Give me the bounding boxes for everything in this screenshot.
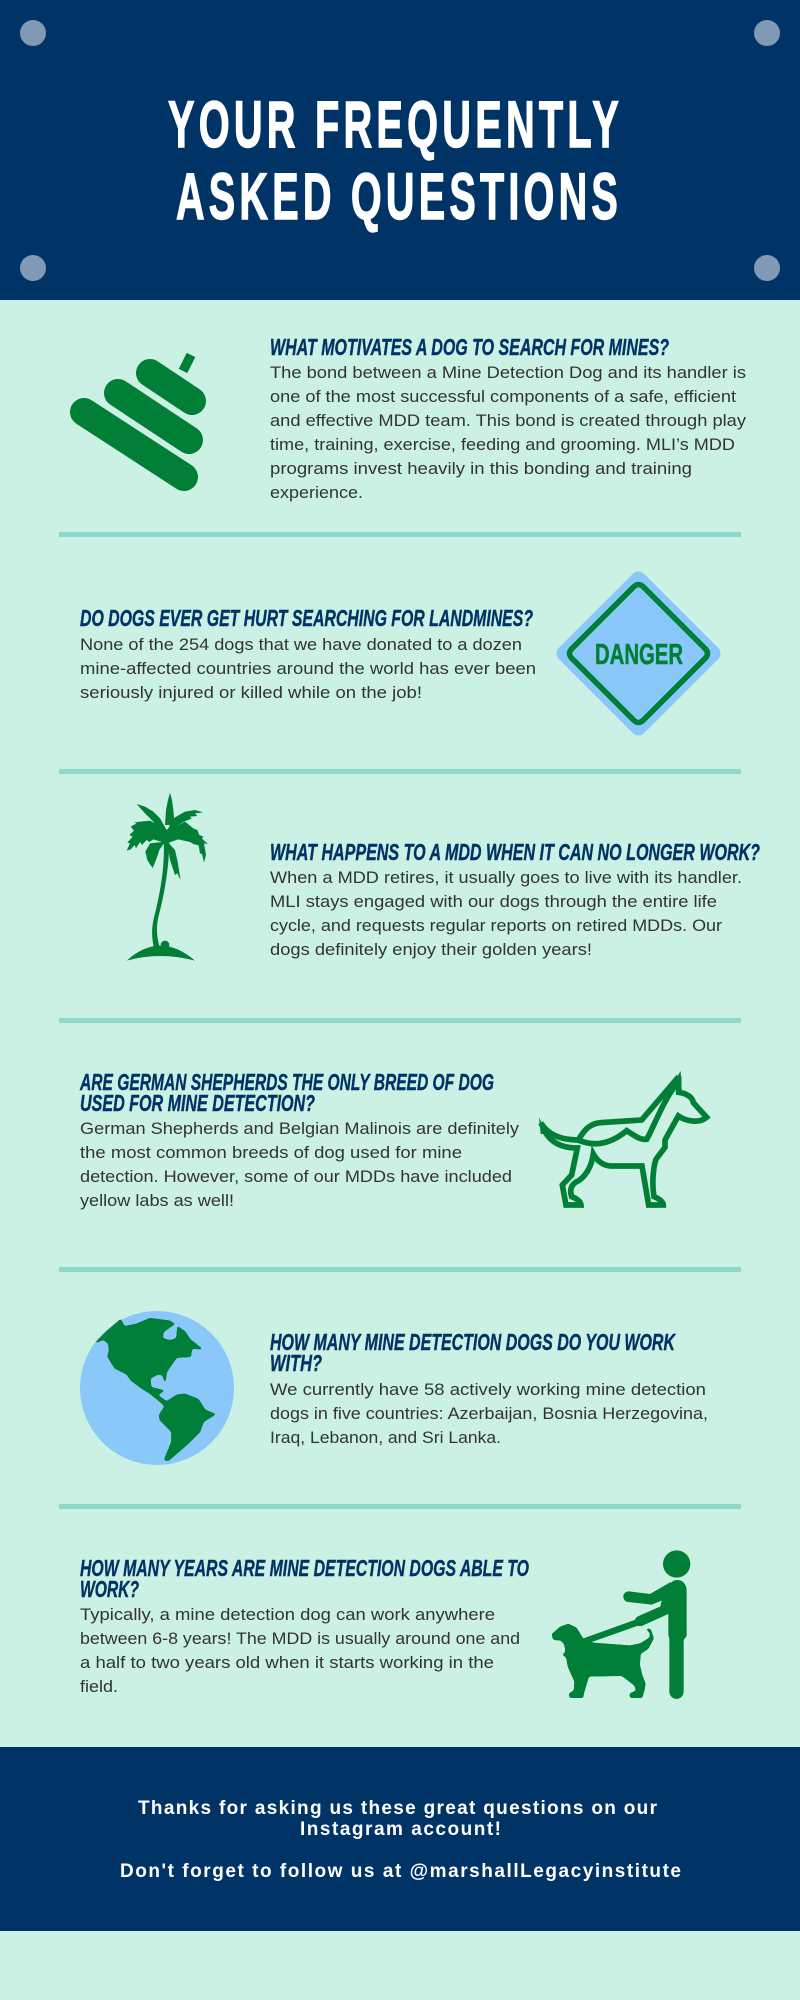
panel: working years [80, 1550, 690, 1699]
icon: landmine [84, 355, 192, 477]
body text: MLI stays engaged with our dogs through the entire life [270, 893, 717, 911]
body text [270, 1381, 708, 1447]
body text [80, 1120, 520, 1210]
icon: globe [80, 1311, 234, 1465]
body text: German Shepherds and Belgian Malinois are definitely [80, 1120, 520, 1138]
header banner [0, 0, 800, 300]
body text: detection. However, some of our MDDs have included [80, 1168, 512, 1186]
panel: what motivates a dog [84, 334, 747, 502]
heading: WITH? [270, 1350, 322, 1376]
body text [80, 636, 536, 702]
body text [80, 1606, 520, 1696]
body text: Iraq, Lebanon, and Sri Lanka. [270, 1429, 501, 1447]
heading: HOW MANY YEARS ARE MINE DETECTION DOGS ABLE TO [80, 1555, 529, 1581]
body text: cycle, and requests regular reports on retired MDDs. Our [270, 917, 723, 935]
body text: programs invest heavily in this bonding and training [270, 460, 692, 478]
body text: mine-affected countries around the world has ever been [80, 660, 536, 678]
body text [270, 869, 742, 959]
icon: person walking dog [551, 1550, 690, 1699]
heading: DO DOGS EVER GET HURT SEARCHING FOR LANDMINES? [80, 605, 533, 631]
body text: field. [80, 1678, 118, 1696]
footer text: Instagram account! [300, 1819, 501, 1840]
heading: ARE GERMAN SHEPHERDS THE ONLY BREED OF DOG [79, 1069, 494, 1095]
footer text: Thanks for asking us these great questions on our [138, 1798, 658, 1819]
panel: how many dogs [80, 1311, 708, 1465]
heading [80, 1555, 529, 1602]
body text: None of the 254 dogs that we have donated to a dozen [80, 636, 522, 654]
panel: do dogs get hurt [80, 580, 712, 728]
body text: seriously injured or killed while on the job! [80, 684, 422, 702]
title [168, 87, 623, 233]
body text: one of the most successful components of a safe, efficient [270, 388, 736, 406]
body text: a half to two years old when it starts working in the [80, 1654, 494, 1672]
panel: german shepherds [79, 1069, 707, 1210]
heading [79, 1069, 494, 1116]
body text: dogs definitely enjoy their golden years! [270, 941, 592, 959]
body text: yellow labs as well! [80, 1192, 234, 1210]
body text: between 6-8 years! The MDD is usually around one and [80, 1630, 520, 1648]
footer banner [0, 1747, 800, 1931]
body text: experience. [270, 484, 363, 502]
icon: danger sign: DANGER [595, 639, 683, 671]
body text: When a MDD retires, it usually goes to live with its handler. [270, 869, 742, 887]
footer text [120, 1798, 681, 1882]
body text: dogs in five countries: Azerbaijan, Bosnia Herzegovina, [270, 1405, 708, 1423]
body text: The bond between a Mine Detection Dog and its handler is [270, 364, 746, 382]
corner dots [20, 20, 780, 281]
icon: palm tree [127, 793, 208, 961]
icon: german shepherd outline [539, 1071, 707, 1205]
footer text: Don't forget to follow us at @marshallLegacyinstitute [120, 1861, 681, 1882]
body text: and effective MDD team. This bond is created through play [270, 412, 747, 430]
panel: retirement [127, 793, 760, 961]
body text [270, 364, 747, 502]
body text: the most common breeds of dog used for mine [80, 1144, 462, 1162]
heading: WORK? [80, 1576, 139, 1602]
heading: USED FOR MINE DETECTION? [80, 1090, 315, 1116]
body text: time, training, exercise, feeding and grooming. MLI’s MDD [270, 436, 735, 454]
body text: We currently have 58 actively working mine detection [270, 1381, 706, 1399]
body text: Typically, a mine detection dog can work anywhere [80, 1606, 495, 1624]
icon: danger sign [564, 580, 712, 728]
heading [270, 1329, 676, 1376]
